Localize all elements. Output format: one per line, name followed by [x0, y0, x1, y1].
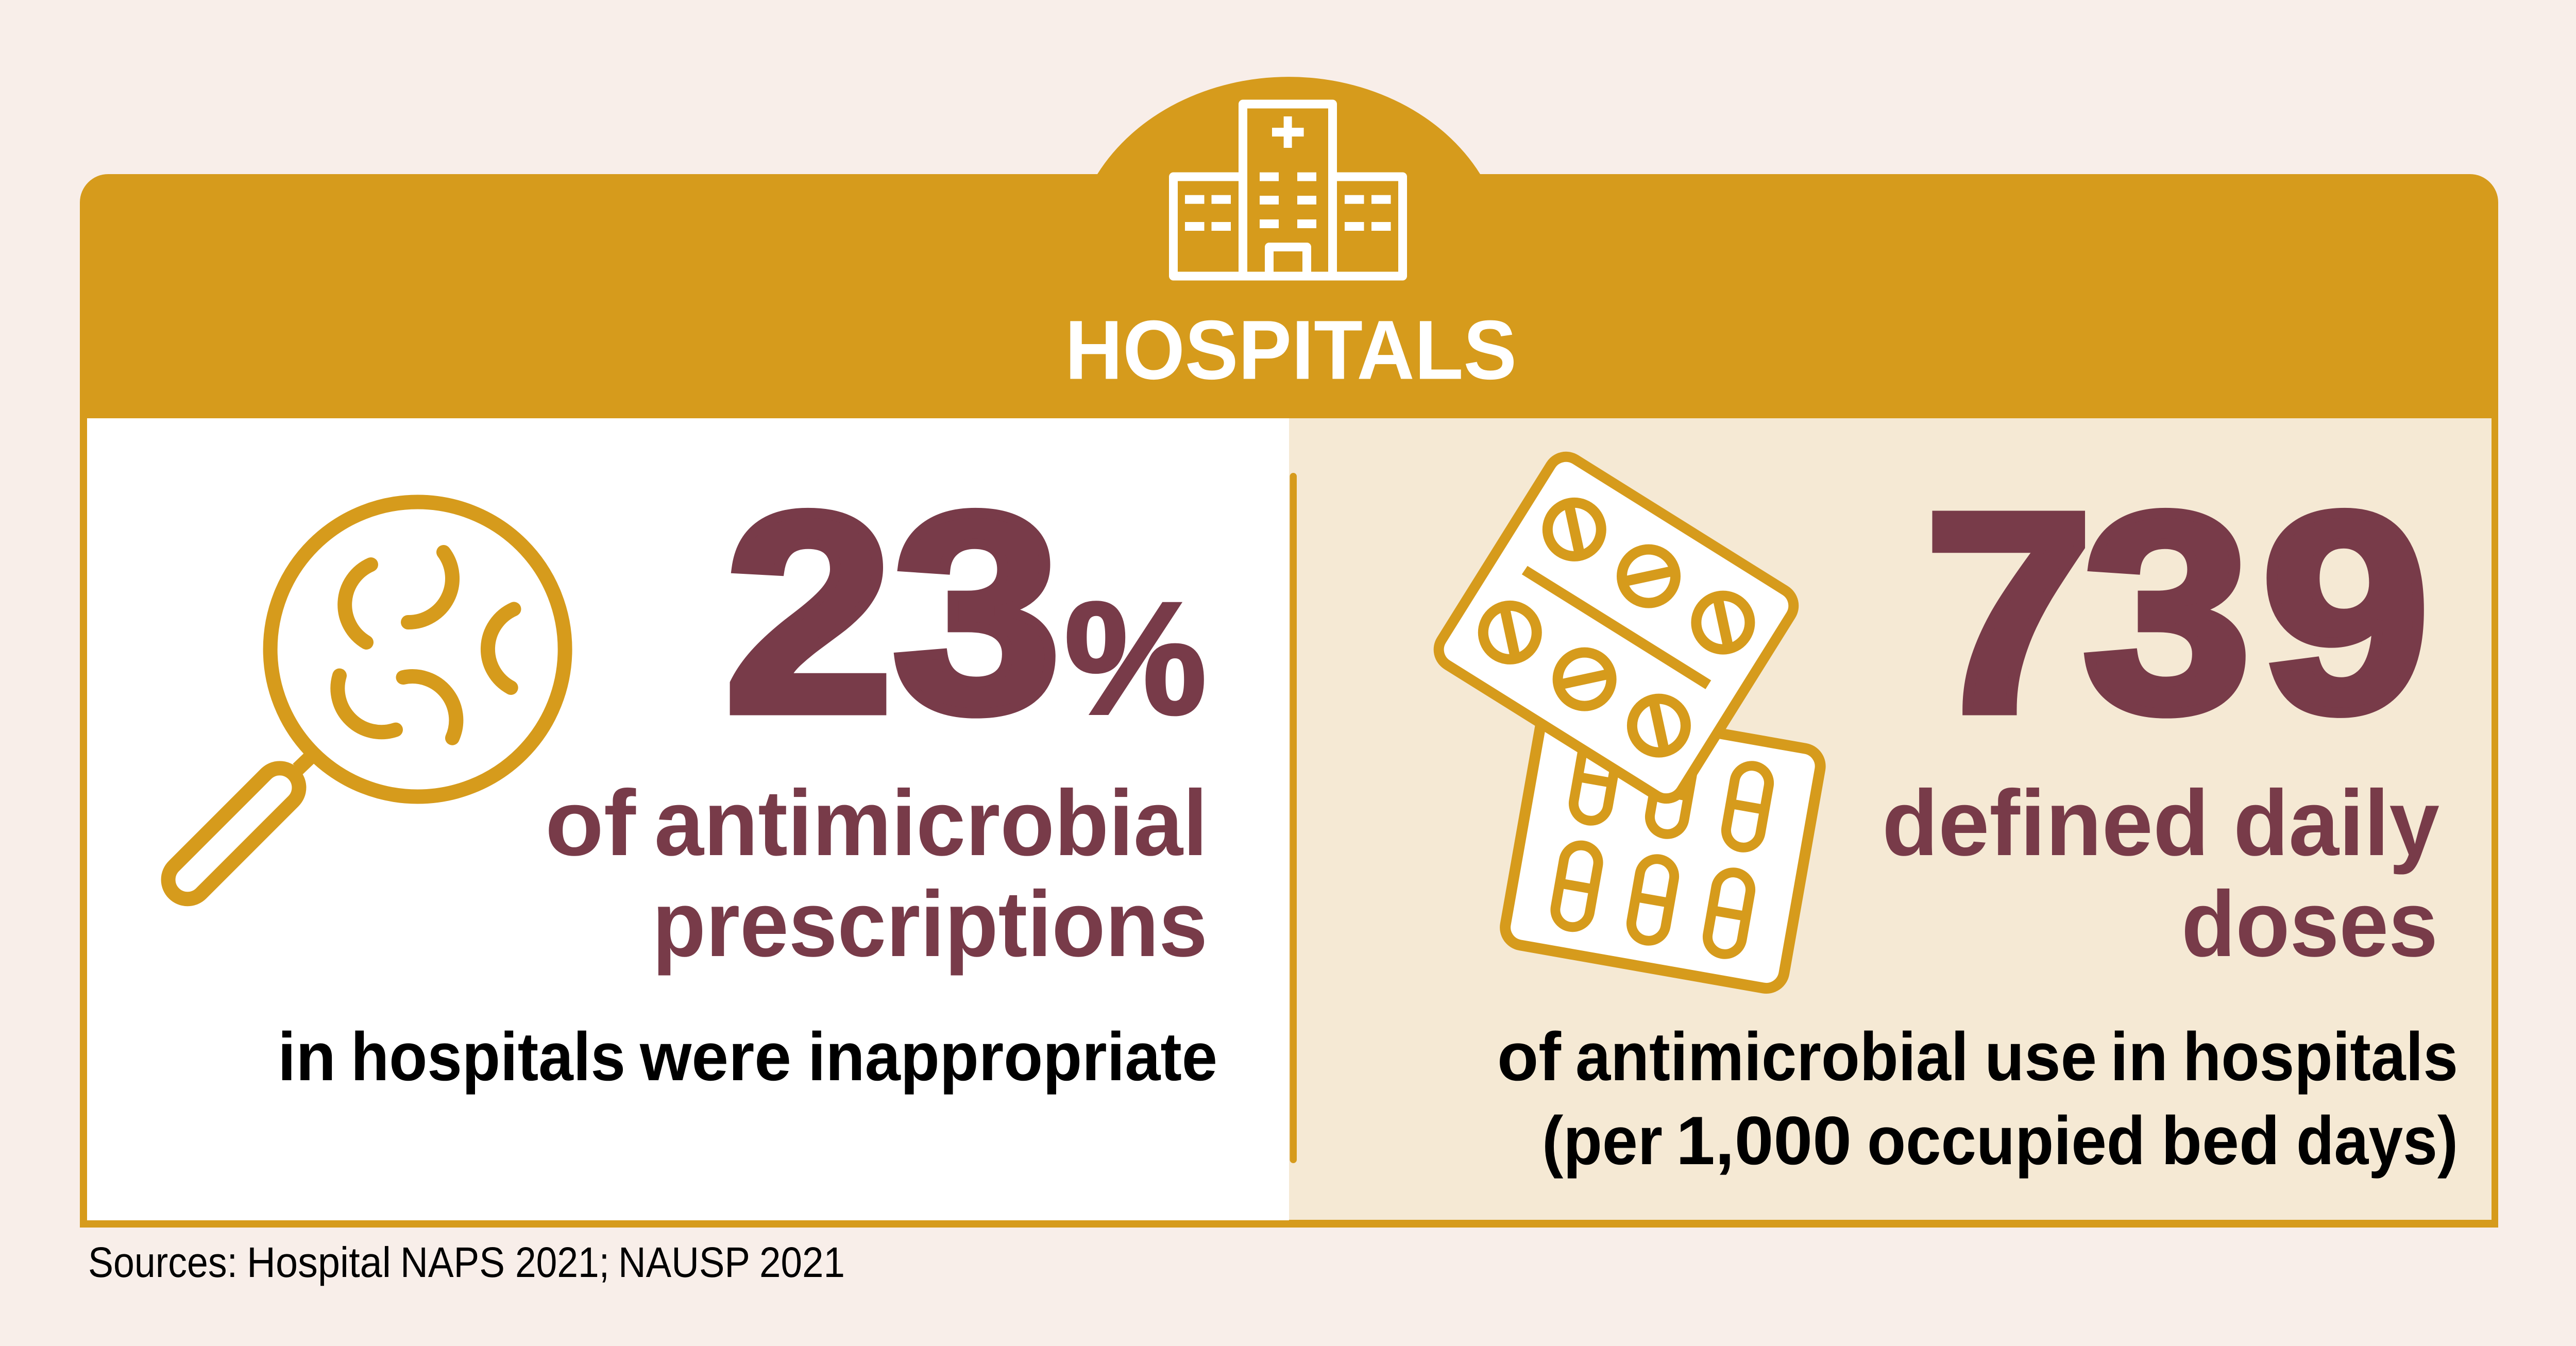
source note: Sources: — [88, 1238, 238, 1286]
stat: 23%: % — [1064, 569, 1207, 747]
back blister pack with capsules — [1502, 703, 1823, 991]
source note — [88, 1238, 845, 1286]
icon: magnifying glass with bacteria — [160, 502, 565, 907]
magnifier handle — [160, 760, 307, 907]
text: of antimicrobial use in hospitals per 1,000 occupied bed days: days) — [2296, 1103, 2458, 1179]
text: of antimicrobial prescriptions: antimicrobial — [654, 771, 1208, 875]
stat: 23% — [725, 455, 1207, 771]
text: in hospitals were inappropriate: hospitals — [351, 1019, 625, 1095]
stat: 23%: 23 — [725, 455, 1061, 771]
front blister pack with tablets — [1432, 450, 1800, 805]
stat: 739: 739 — [1925, 455, 2430, 771]
source note: Hospital — [247, 1238, 391, 1286]
text: of antimicrobial use in hospitals per 1,000 occupied bed days: bed — [2161, 1103, 2280, 1179]
source note: 2021; — [515, 1238, 609, 1286]
source note: NAUSP — [618, 1238, 750, 1286]
divider — [1290, 473, 1297, 1163]
text: of antimicrobial use in hospitals per 1,000 occupied bed days — [1497, 1019, 2458, 1179]
text: in hospitals were inappropriate: in — [278, 1019, 336, 1095]
text: defined daily doses: daily — [2233, 771, 2439, 875]
text: of antimicrobial prescriptions: of — [545, 771, 636, 875]
panel: left white section — [87, 418, 1289, 1220]
icon: blister packs — [1432, 450, 1823, 991]
magnifier connector — [298, 758, 309, 769]
text: defined daily doses: defined — [1882, 771, 2209, 875]
text: of antimicrobial use in hospitals per 1,000 occupied bed days: use — [1985, 1019, 2097, 1095]
magnifier lens — [270, 502, 565, 796]
source note: NAPS — [400, 1238, 505, 1286]
text: defined daily doses — [1882, 771, 2439, 976]
text: of antimicrobial use in hospitals per 1,000 occupied bed days: in — [2110, 1019, 2168, 1095]
text: of antimicrobial use in hospitals per 1,000 occupied bed days: of — [1497, 1019, 1562, 1095]
panel: right beige section — [1289, 418, 2492, 1220]
source note: 2021 — [759, 1238, 845, 1286]
text: of antimicrobial use in hospitals per 1,000 occupied bed days: occupied — [1867, 1103, 2145, 1179]
text: of antimicrobial prescriptions — [545, 771, 1208, 976]
text: in hospitals were inappropriate — [278, 1019, 1217, 1095]
text: of antimicrobial prescriptions: prescriptions — [652, 872, 1208, 976]
text: of antimicrobial use in hospitals per 1,000 occupied bed days: hospitals — [2183, 1019, 2458, 1095]
heading: HOSPITALS: HOSPITALS — [1065, 303, 1517, 397]
bacteria — [337, 552, 514, 738]
icon: hospital building — [1174, 104, 1402, 276]
text: in hospitals were inappropriate: were — [639, 1019, 791, 1095]
text: defined daily doses: doses — [2181, 872, 2438, 976]
text: of antimicrobial use in hospitals per 1,000 occupied bed days: 1,000 — [1676, 1103, 1852, 1179]
text: of antimicrobial use in hospitals per 1,000 occupied bed days: antimicrobial — [1575, 1019, 1969, 1095]
text: in hospitals were inappropriate: inappropriate — [808, 1019, 1217, 1095]
text: of antimicrobial use in hospitals per 1,000 occupied bed days: (per — [1542, 1103, 1663, 1179]
